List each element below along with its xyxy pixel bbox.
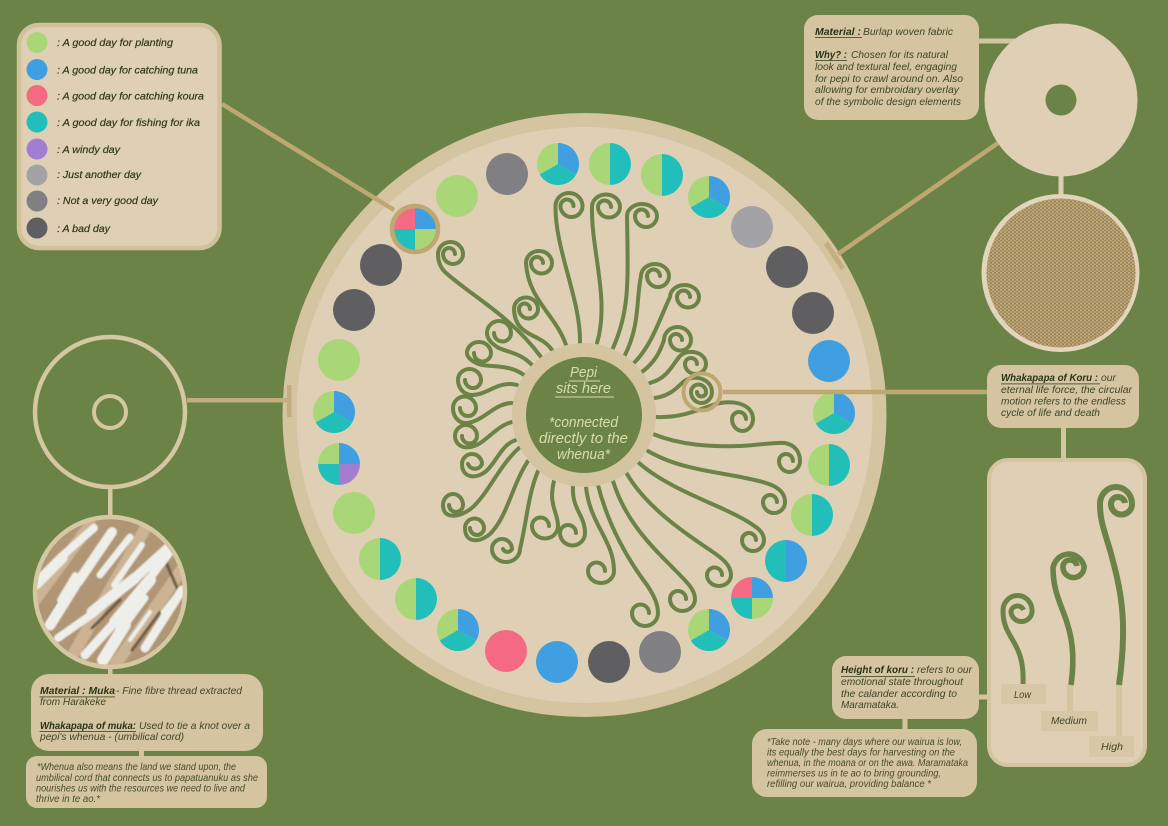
legend: ika: : A good day for fishing for ika [57, 117, 200, 129]
connector: koru panel to height panel [1061, 428, 1066, 459]
label stem: high [1116, 685, 1122, 737]
panel: height of koru: refers to our [917, 664, 972, 676]
legend: not very good [26, 190, 159, 212]
panel: muka material: pepi's whenua - (umbilical cord) [39, 731, 184, 743]
panel: muka material [31, 674, 263, 751]
panel: burlap material: Burlap woven fabric [863, 26, 954, 38]
panel: whakapapa of koru [987, 365, 1139, 428]
label stem: medium [1067, 685, 1073, 712]
muka fibre photo [35, 517, 185, 667]
centre hub: pepi sits here: sits here [556, 380, 611, 397]
panel: muka material: Material : Muka [40, 685, 115, 697]
connector: muka panels [139, 751, 144, 757]
arrow: left diagram to mat [187, 385, 292, 417]
legend: bad day [26, 218, 111, 238]
panel: whenua note: *Whenua also means the land we stand upon, the [37, 762, 236, 773]
top disc diagram [984, 24, 1138, 196]
panel: burlap material: Material : [815, 26, 861, 38]
panel: koru height chart [989, 460, 1145, 765]
koru: high: High [1101, 741, 1123, 753]
centre hub: pepi sits here: Pepi [570, 364, 598, 381]
koru fronds radiating from the centre [438, 193, 800, 626]
panel: whakapapa of koru: cycle of life and death [1001, 407, 1100, 419]
panel: burlap material: for pepi to crawl around on. Also [815, 73, 963, 85]
legend: tuna [26, 59, 198, 80]
panel: whakapapa of koru: motion refers to the endless [1001, 396, 1127, 408]
panel: whakapapa of koru: Whakapapa of Koru : [1001, 372, 1098, 384]
panel: whenua note: nourishes us with the resources we need to live and [36, 784, 246, 794]
panel: whakapapa of koru: eternal life force, the circular [1001, 384, 1132, 396]
legend: ika [26, 112, 200, 132]
connector: burlap panel to disc [979, 38, 1015, 44]
centre hub: pepi sits here [512, 343, 656, 487]
legend: planting: : A good day for planting [57, 37, 173, 49]
panel: muka material: Whakapapa of muka: [40, 720, 136, 732]
arrow: disc to mat [826, 143, 998, 269]
centre hub: pepi sits here: whenua* [557, 446, 611, 463]
centre hub: pepi sits here: *connected [549, 414, 619, 431]
legend: windy: : A windy day [57, 144, 121, 156]
burlap texture photo [982, 194, 1140, 352]
panel: height of koru: Height of koru : [841, 664, 914, 676]
panel: burlap material: Why? : [815, 49, 847, 61]
panel: muka material: Used to tie a knot over a [139, 720, 250, 732]
panel: height of koru [832, 656, 979, 719]
legend: not very good: : Not a very good day [57, 195, 159, 207]
panel: burlap material: Chosen for its natural [851, 49, 949, 61]
legend: just another day [26, 164, 142, 186]
legend: bad day: : A bad day [57, 223, 111, 235]
panel: muka material: from Harakeke [40, 696, 106, 708]
panel: wairua note: whenua, in the moana or on the awa. Maramataka [767, 758, 969, 769]
legend: tuna: : A good day for catching tuna [57, 64, 198, 76]
panel: height of koru: Maramataka. [841, 699, 899, 711]
legend panel [19, 25, 220, 248]
panel: height of koru: emotional state throughout [841, 676, 964, 688]
arrow: koru callout line [684, 374, 988, 410]
panel: burlap material: allowing for embroidary overlay [815, 84, 960, 96]
connector: height text to chart [978, 694, 989, 700]
panel: whenua note: thrive in te ao.* [36, 794, 101, 805]
panel: burlap material: of the symbolic design elements [815, 96, 962, 108]
ring of 30 maramataka days [313, 143, 855, 683]
koru: high [1089, 487, 1134, 757]
legend: just another day: : Just another day [57, 169, 142, 181]
legend: planting [26, 32, 173, 53]
panel: whenua note [26, 756, 267, 808]
arrow: legend to highlighted day [222, 104, 438, 252]
panel: wairua note: reimmerses us in te ao to bring grounding, [767, 768, 941, 780]
panel: wairua note: *Take note - many days where our wairua is low, [767, 737, 962, 748]
panel: whenua note: umbilical cord that connects us to papatuanuku as she [36, 773, 259, 784]
panel: muka material: - Fine fibre thread extracted [116, 685, 243, 697]
koru: low [1001, 596, 1046, 704]
left detail: cord diagram [35, 337, 185, 517]
panel: whakapapa of koru: our [1101, 372, 1116, 384]
legend: koura [26, 85, 204, 106]
centre hub: pepi sits here: directly to the [539, 430, 628, 447]
legend: windy [26, 138, 121, 160]
koru: medium: Medium [1051, 715, 1087, 727]
connector: height text to note [902, 719, 908, 730]
connector: muka photo to text [108, 667, 112, 675]
panel: burlap material: look and textural feel, engaging [815, 61, 957, 73]
panel: wairua note: its equally the best days for harvesting on the [767, 748, 956, 758]
koru: medium [1041, 554, 1098, 731]
panel: wairua note: refilling our wairua, providing balance * [767, 779, 932, 790]
panel: burlap material [804, 15, 979, 120]
legend: koura: : A good day for catching koura [57, 90, 204, 102]
koru: low: Low [1014, 689, 1032, 701]
panel: wairua note [752, 729, 977, 797]
main circular mat [282, 113, 886, 717]
panel: height of koru: the calander according to [841, 688, 957, 700]
